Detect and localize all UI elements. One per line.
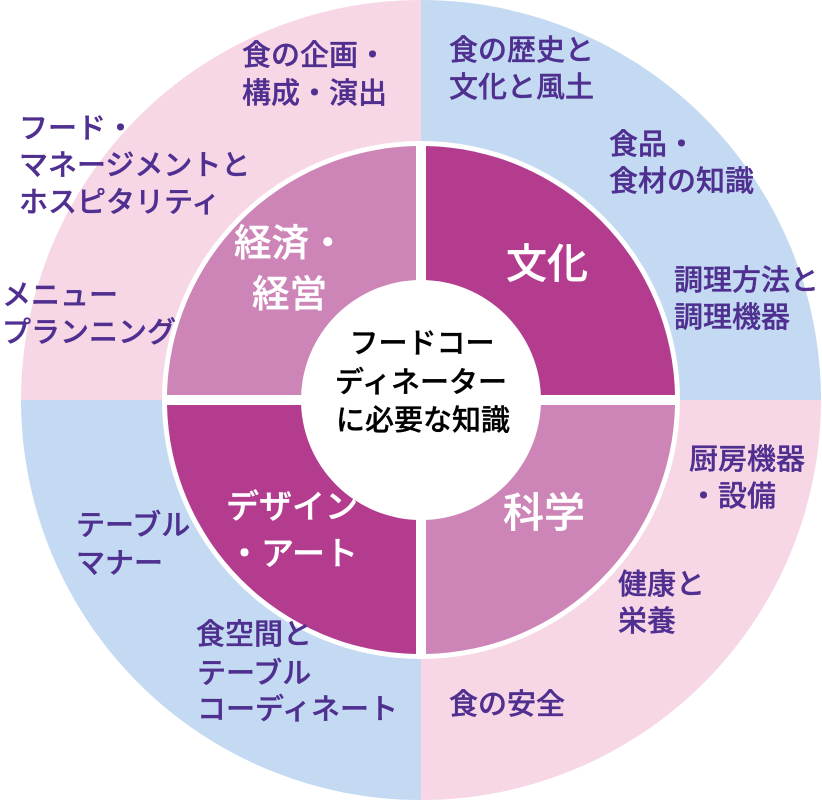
- heading: design and art: デザイン: [226, 488, 358, 525]
- label: kitchen equipment: 厨房機器: [689, 443, 805, 476]
- label: food history: 文化と風土: [449, 71, 594, 104]
- label: food materials: 食品・: [609, 128, 696, 161]
- label: food management: マネージメントと: [19, 150, 250, 182]
- label: health: 健康と: [618, 568, 705, 601]
- heading: economy and management: 経済・: [234, 222, 346, 264]
- center title: フードコー: [349, 328, 495, 360]
- label: table coordinate: 食空間と: [196, 618, 312, 651]
- heading: science: 科学: [503, 490, 585, 536]
- heading: design and art: ・アート: [228, 535, 358, 572]
- center circle: [301, 280, 541, 520]
- inner ring: [162, 141, 680, 659]
- label: health: 栄養: [618, 605, 676, 638]
- label: table manners: マナー: [76, 548, 163, 580]
- label: food management: ホスピタリティ: [19, 187, 220, 219]
- label: food safety: 食の安全: [449, 688, 565, 721]
- label: food planning: 構成・演出: [242, 77, 387, 110]
- heading: economy and management: 経営: [252, 273, 327, 315]
- label: food history: 食の歴史と: [449, 34, 594, 67]
- label: food planning: 食の企画・: [242, 39, 387, 72]
- heading: culture: 文化: [506, 241, 588, 287]
- label: cooking methods: 調理機器: [674, 301, 790, 334]
- label: food materials: 食材の知識: [609, 165, 754, 198]
- label: table coordinate: コーディネート: [197, 693, 398, 726]
- label: food management: フード・: [19, 113, 135, 145]
- center title: に必要な知識: [336, 404, 510, 437]
- label: menu planning: プランニング: [2, 316, 176, 349]
- label: kitchen equipment: ・設備: [689, 480, 776, 513]
- label: menu planning: メニュー: [2, 280, 118, 312]
- label: cooking methods: 調理方法と: [674, 264, 819, 297]
- label: table manners: テーブル: [76, 509, 190, 542]
- center title: ディネーター: [335, 366, 507, 399]
- label: table coordinate: テーブル: [197, 657, 311, 690]
